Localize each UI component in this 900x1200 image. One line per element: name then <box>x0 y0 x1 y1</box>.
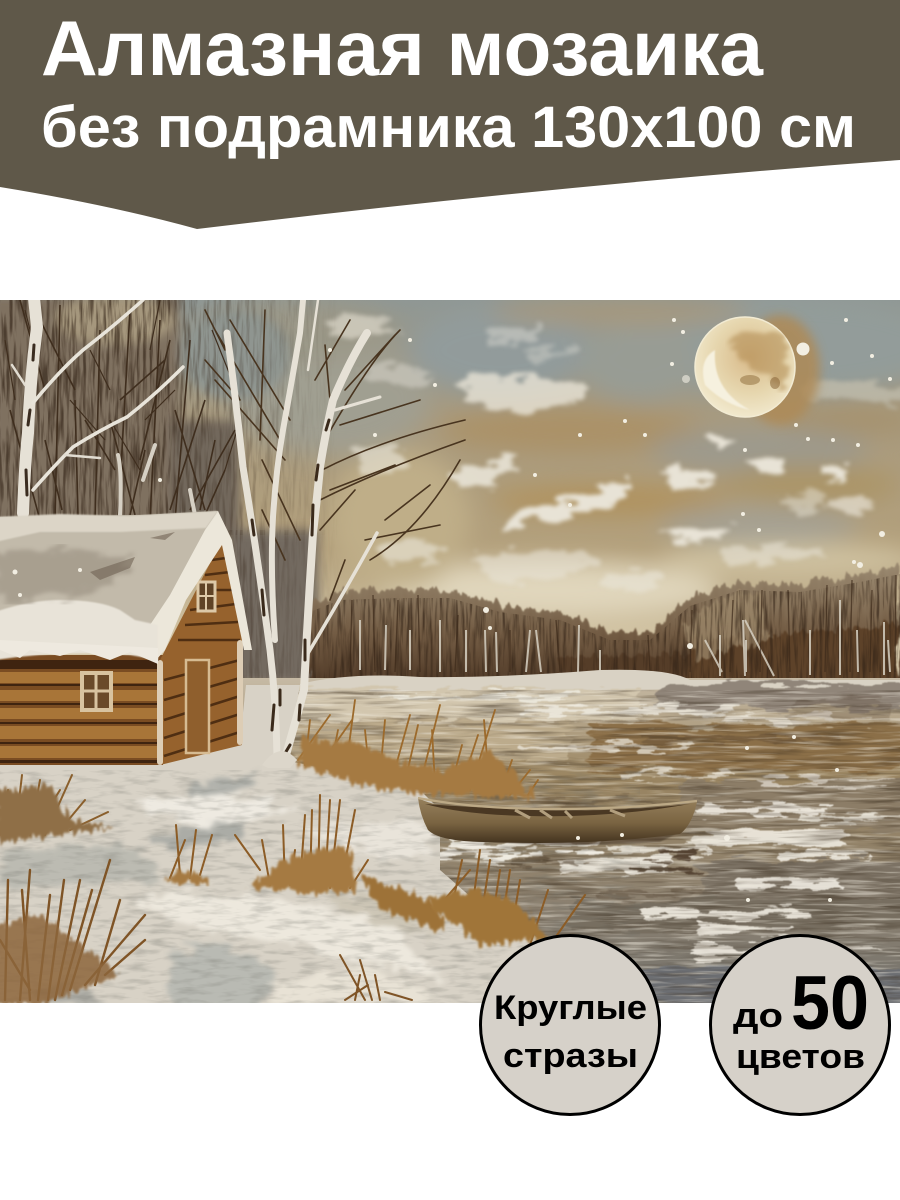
grass behind tree <box>298 700 538 798</box>
grass left top <box>0 775 115 842</box>
shadow <box>430 832 680 845</box>
frozen lake <box>240 670 900 1008</box>
birch trees foreground <box>205 300 465 768</box>
badge: round rhinestones <box>480 936 660 1114</box>
falling snow <box>12 318 892 902</box>
painting: winter landscape <box>0 295 900 1010</box>
left birch trees <box>12 298 195 515</box>
moon <box>695 315 820 425</box>
grass bottom left <box>0 860 145 1005</box>
door <box>186 660 209 753</box>
interior <box>425 804 690 816</box>
badge: up to 50 colours <box>710 936 890 1114</box>
dark forest behind cabin <box>0 295 340 685</box>
grass middle large <box>250 795 445 932</box>
grass tufts <box>0 700 585 1005</box>
front wall <box>0 655 163 765</box>
corner logs <box>157 640 243 765</box>
branches <box>205 310 465 600</box>
snowy bank <box>0 685 640 1010</box>
sky <box>0 295 900 700</box>
grass middle small <box>165 825 260 884</box>
side wall <box>160 540 242 765</box>
badge: up to 50 colours: до <box>733 997 783 1035</box>
title line 2: без подрамника 130х100 см <box>41 95 856 160</box>
rim <box>418 798 697 809</box>
header banner <box>0 0 900 229</box>
grass lower right by boat <box>425 850 585 945</box>
snow roof <box>0 511 252 664</box>
title line 1: Алмазная мозаика <box>41 4 764 92</box>
thwarts <box>515 810 625 818</box>
log cabin <box>0 511 252 765</box>
badge: up to 50 colours: 50 <box>791 961 869 1046</box>
grass bottom center <box>340 955 412 1000</box>
badge: round rhinestones: стразы <box>503 1037 638 1075</box>
clouds <box>320 314 900 592</box>
front window <box>82 673 111 710</box>
badge: round rhinestones: Круглые <box>494 989 647 1027</box>
hull <box>418 798 697 843</box>
cabin side window <box>198 582 215 611</box>
distant tree line <box>310 566 900 690</box>
canoe <box>418 798 697 845</box>
badge: up to 50 colours: цветов <box>736 1038 865 1076</box>
